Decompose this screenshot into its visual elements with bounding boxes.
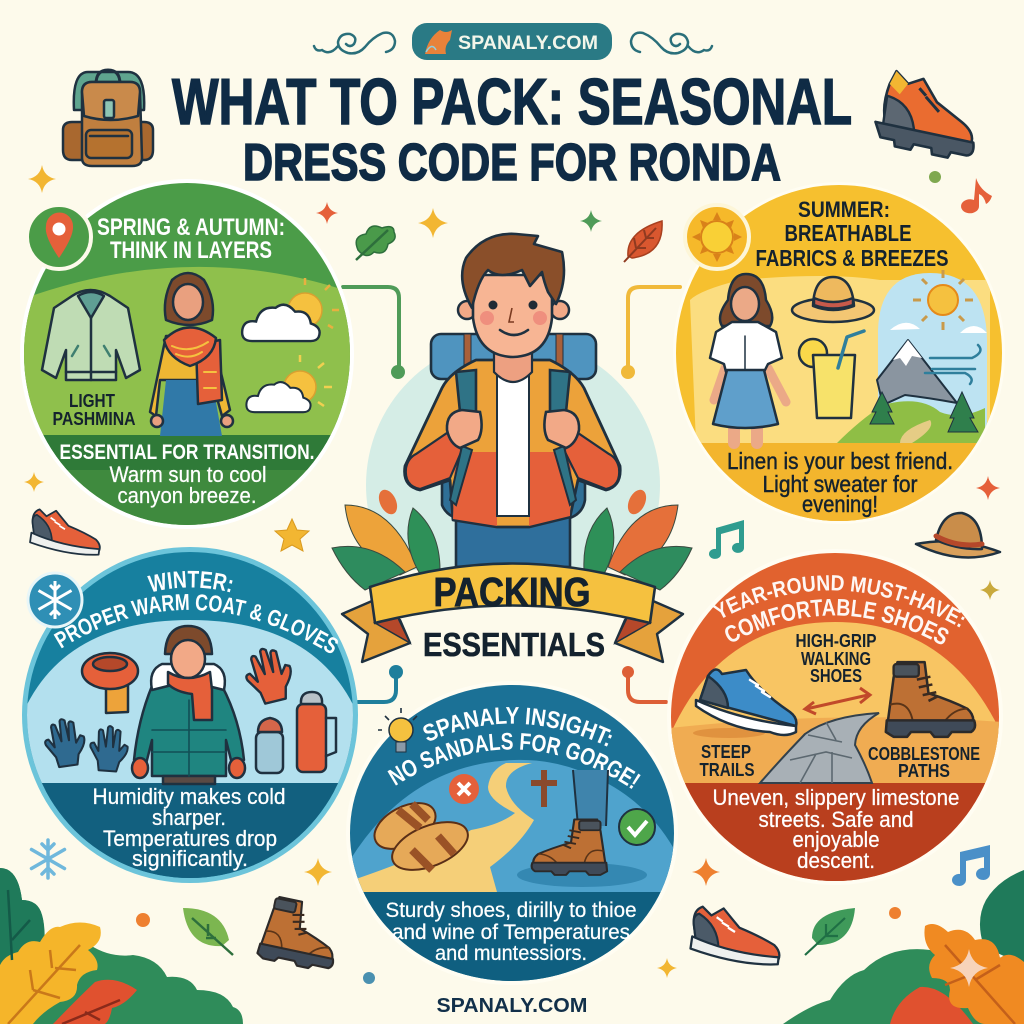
icon: music note top right	[961, 178, 992, 213]
icon: sneaker left	[30, 509, 100, 555]
left flourish	[314, 33, 395, 53]
panel: year-round shoes: streets. Safe and	[758, 807, 914, 832]
icon: red glove	[241, 644, 297, 707]
icon: straw hat	[792, 277, 874, 322]
panel: winter: significantly.	[132, 846, 248, 871]
jeans	[456, 515, 570, 567]
bedroll	[431, 334, 596, 379]
icon: hiking shoe top right	[871, 69, 986, 162]
landscape	[870, 270, 987, 432]
panel: summer	[670, 180, 1010, 528]
heading: SUMMER:	[798, 197, 890, 222]
connector lines	[343, 287, 680, 702]
shirt	[497, 376, 529, 516]
central figure group	[332, 234, 692, 590]
icon: red cross badge	[449, 774, 479, 804]
panel: spring and autumn: PASHMINA	[52, 409, 136, 429]
panel: spanaly insight	[350, 685, 674, 981]
person in green coat	[132, 626, 245, 784]
footer website: SPANALY.COM	[436, 995, 588, 1017]
icon: lemonade	[799, 331, 864, 418]
panel: year-round shoes: enjoyable	[792, 827, 880, 852]
icon: blue shoe	[696, 669, 796, 735]
panel: winter: Temperatures drop	[103, 826, 277, 851]
panel: spring and autumn: THINK IN LAYERS	[110, 237, 272, 264]
icon: music note bottom right	[952, 845, 990, 886]
panel: year-round shoes: TRAILS	[700, 760, 754, 780]
caption: Uneven, slippery limestone	[712, 785, 960, 810]
icon: leg with boot	[532, 770, 608, 875]
label: light pashmina: LIGHT	[69, 391, 115, 411]
icon: backpack	[63, 70, 153, 166]
icon: scarf	[82, 653, 138, 713]
right flourish	[631, 33, 712, 53]
panel: year-round shoes: WALKING	[801, 649, 871, 669]
hair	[462, 234, 564, 308]
foliage lower right	[783, 870, 1024, 1024]
icon: sun badge	[685, 205, 749, 269]
title: DRESS CODE FOR RONDA	[243, 134, 781, 192]
icon: sun behind cloud	[242, 278, 339, 341]
panel: year-round shoes: SHOES	[810, 666, 862, 686]
heading: YEAR-ROUND MUST-HAVE:	[712, 575, 965, 628]
icon: snowflake badge	[28, 573, 82, 627]
panel: year-round shoes: descent.	[797, 848, 875, 873]
leaves	[332, 487, 692, 590]
hands	[447, 410, 482, 448]
icon: brown boot	[886, 662, 975, 737]
panel: year-round shoes: COMFORTABLE SHOES	[725, 599, 948, 644]
panel: summer: BREATHABLE	[784, 220, 912, 246]
panel: year-round shoes	[668, 553, 999, 881]
straps	[456, 370, 476, 412]
caption: ESSENTIAL FOR TRANSITION.	[60, 441, 314, 464]
panel: summer: Light sweater for	[762, 471, 918, 497]
panel: winter: PROPER WARM COAT & GLOVES	[54, 594, 338, 654]
icon: leaf upper right	[624, 221, 662, 262]
panel: spring and autumn: Warm sun to cool	[110, 462, 266, 487]
woman with scarf	[150, 273, 233, 436]
woman in skirt	[710, 274, 786, 443]
icon: cobblestones	[760, 713, 879, 783]
caption: Humidity makes cold	[92, 784, 286, 809]
panel: spanaly insight: and muntessiors.	[435, 942, 587, 965]
heading: SPANALY INSIGHT:	[423, 707, 612, 746]
icon: sneaker lower right	[690, 907, 779, 964]
icon: leaf lower left	[183, 908, 233, 955]
icon: leaf lower right	[805, 908, 855, 955]
icon: location pin	[27, 205, 91, 269]
panel: spanaly insight: and wine of Temperatures	[392, 921, 630, 944]
icon: boot lower left	[257, 895, 344, 973]
panel: winter	[22, 547, 358, 883]
neck	[494, 345, 532, 382]
heading: WINTER:	[147, 570, 232, 592]
brand badge	[412, 23, 612, 60]
label: cobblestone paths: COBBLESTONE	[868, 744, 980, 764]
panel: spanaly insight: NO SANDALS FOR GORGE!	[388, 732, 641, 789]
panel: year-round shoes: PATHS	[898, 761, 950, 781]
icon: wooden cross	[531, 770, 557, 807]
panel: spring and autumn	[20, 179, 360, 536]
icon: sandals	[367, 794, 475, 880]
ears	[458, 301, 476, 319]
icon: light bulb	[378, 708, 417, 752]
face	[473, 275, 552, 357]
icon: leaf upper middle	[356, 226, 395, 260]
icon: snowflake	[32, 840, 64, 878]
icon: jacket	[42, 290, 140, 380]
icon: check badge	[619, 809, 655, 845]
shoe shadow	[693, 728, 765, 738]
pack body	[442, 440, 585, 520]
label: steep trails: STEEP	[701, 742, 751, 762]
panel: summer: FABRICS & BREEZES	[756, 245, 948, 271]
icon: blue gloves	[42, 716, 129, 772]
icon: flasks	[256, 692, 336, 773]
icon: music note middle	[709, 520, 744, 559]
foliage lower left	[0, 868, 243, 1024]
panel: spring and autumn: canyon breeze.	[118, 483, 256, 508]
jacket	[405, 360, 620, 527]
eyes and smile	[480, 300, 547, 335]
icon: sun hat right	[916, 513, 1000, 557]
pale backdrop circle	[366, 338, 660, 570]
panel: winter: sharper.	[152, 805, 226, 830]
brand badge: SPANALY.COM	[458, 33, 598, 54]
ribbon banner: packing essentials: ESSENTIALS	[423, 626, 605, 663]
label: high grip walking shoes: HIGH-GRIP	[796, 631, 876, 651]
icon: double arrow	[805, 688, 870, 714]
panel: summer: evening!	[802, 491, 878, 517]
caption: Sturdy shoes, dirilly to thioe	[386, 899, 636, 922]
decorative stars and dots	[24, 165, 1000, 984]
heading: SPRING & AUTUMN:	[97, 214, 285, 241]
caption: Linen is your best friend.	[727, 448, 953, 474]
icon: sun behind cloud two	[246, 355, 332, 412]
ribbon banner: packing essentials: PACKING	[434, 569, 590, 615]
ribbon banner: packing essentials	[342, 564, 683, 663]
title	[172, 65, 852, 192]
